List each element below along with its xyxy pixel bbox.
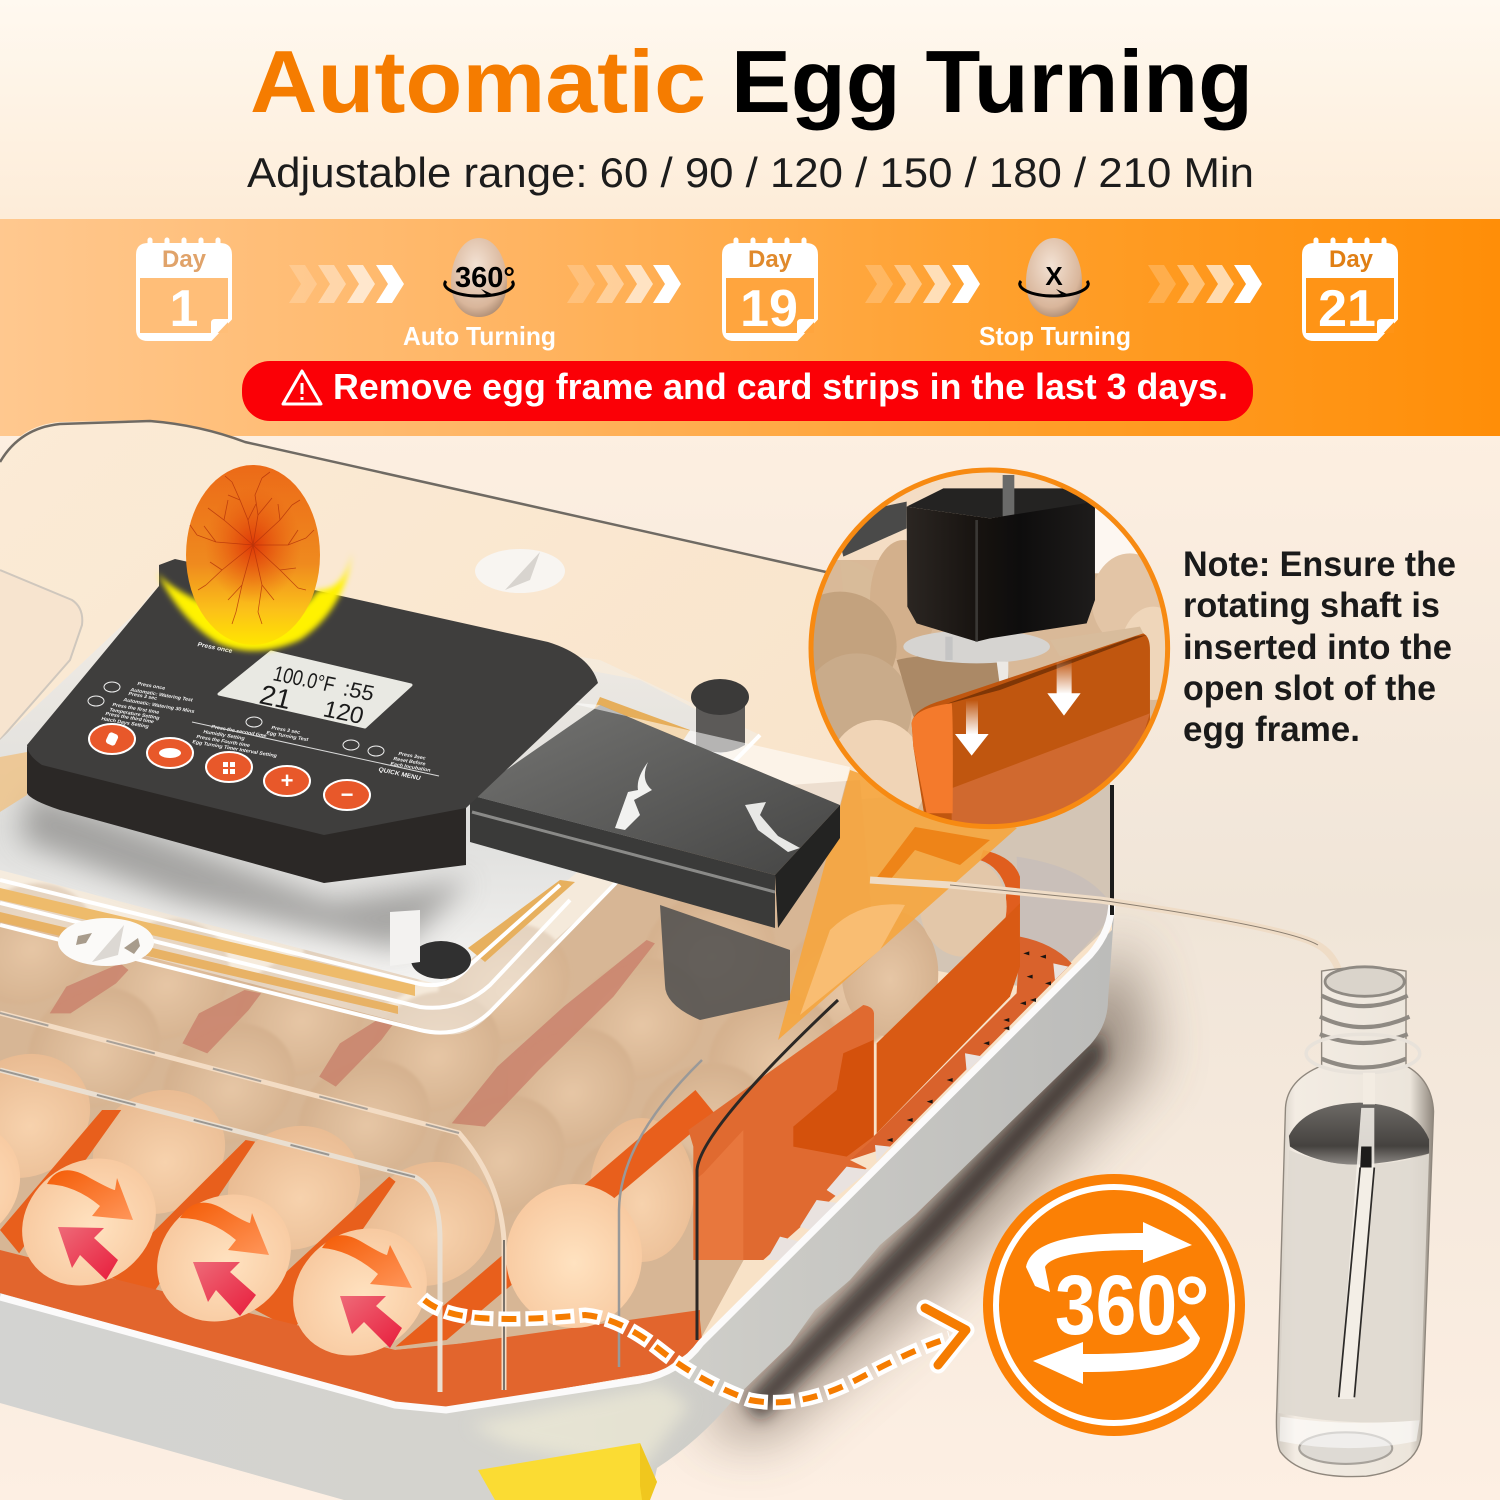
panel side: [27, 747, 466, 883]
icon: red arrow 1: [58, 1227, 118, 1280]
calendar: day 21: Day: [1329, 246, 1374, 273]
callout top background: [838, 472, 1062, 560]
lcd screen: [219, 652, 411, 727]
arrow head: [925, 1308, 966, 1365]
key stem: [996, 662, 1008, 682]
icon: curved orange arrow 2: [180, 1203, 269, 1255]
lid right wall edge: [1110, 785, 1114, 915]
cork strip front: [0, 888, 415, 996]
panel instruction text: Hatch Days Setting: [100, 716, 150, 730]
box end: [775, 805, 840, 928]
water body: [1279, 1150, 1429, 1422]
panel top face: [27, 559, 598, 835]
frame bright edge: [912, 703, 953, 813]
title: Automatic: [250, 32, 706, 131]
calendar: day 19: [723, 240, 817, 340]
panel instruction text: Press 3 sec: [127, 691, 158, 702]
egg red core: [205, 487, 301, 603]
icon: curved orange arrow 3: [322, 1235, 412, 1288]
lid hole disc: [475, 549, 565, 593]
shadow below control panel: [20, 790, 470, 950]
egg seen through orange sheet: [800, 904, 905, 1015]
knob shaft back: [696, 700, 745, 752]
knob front: [411, 941, 471, 979]
cork strip left: [0, 752, 27, 812]
neck threads: [1320, 996, 1409, 1068]
dashed arrow path from egg to 360 badge: [422, 1298, 966, 1402]
eggs: front row with turning arrows: [0, 1098, 642, 1381]
panel instruction text: Reset Before: [392, 756, 426, 767]
white steps: [767, 963, 1068, 1260]
motor disc: [903, 630, 1050, 663]
eggs: back rows: [0, 860, 934, 1276]
water tube: [870, 880, 1345, 1010]
egg behind frame: [842, 910, 938, 1037]
panel instruction text: Press the first time: [111, 702, 160, 716]
lcd readouts: 120: [320, 696, 367, 730]
bottom glass: [1299, 1432, 1392, 1464]
clear sheet over box: [565, 702, 850, 805]
panel instruction text: Egg Turning Timer Interval Setting: [191, 739, 278, 759]
icon: red arrow 2: [193, 1262, 256, 1316]
icon: egg stop turning: X: [1045, 261, 1063, 291]
icon: egg 360 auto turning: [445, 238, 515, 317]
warning pill: Remove egg frame and card strips in the last 3 days.: [333, 366, 1228, 407]
cork strip front 2: [0, 912, 398, 1014]
lid side tray: [0, 570, 82, 740]
panel buttons: [89, 724, 370, 810]
icon: red arrow 3: [340, 1296, 402, 1348]
subtitle: adjustable range: Adjustable range: 60 / 90 / 120 / 150 / 180 / 210 Min: [247, 149, 1254, 196]
plate white edges: [0, 735, 760, 1033]
box bevel: [472, 812, 775, 892]
water bottle: [1276, 967, 1434, 1477]
control panel: [27, 559, 598, 883]
white post: [390, 910, 420, 966]
360 degree badge: [983, 1174, 1245, 1436]
panel instruction text: Automatic: Watering Test: [129, 687, 194, 703]
panel instruction text: Each Incubation: [389, 761, 431, 774]
tube entry: [1363, 1073, 1375, 1104]
calendar: day 1: Day: [162, 246, 207, 273]
white rim: [0, 900, 1112, 1410]
perforated strip: [850, 937, 1072, 1160]
panel instruction text: Press the third time: [104, 711, 155, 725]
straw upper: [1360, 1146, 1372, 1167]
bottom highlight: [1280, 1417, 1420, 1448]
lcd readouts: 100.0°F: [271, 661, 338, 697]
eggs area tint: [0, 780, 880, 1390]
shadow under incubator: [700, 940, 1150, 1440]
motor shaft: [1003, 475, 1014, 518]
panel instruction text: [100, 641, 431, 782]
contact shadow under incubator: [745, 1030, 1105, 1420]
panel instruction text: Egg Turning Test: [265, 730, 309, 743]
air gap: [1289, 1103, 1429, 1165]
callout ring: [811, 470, 1168, 827]
title: Egg Turning: [731, 32, 1253, 131]
top arrow: [1026, 1222, 1192, 1292]
360 numerals: 360: [1055, 1258, 1177, 1352]
calendar: day 21: [1303, 240, 1397, 340]
metal pin: [945, 637, 953, 660]
degree sign: °: [1174, 1258, 1210, 1360]
note text: [1183, 545, 1456, 749]
panel instruction text: Press 3sec: [397, 751, 427, 761]
calendar: day 19: Day: [748, 246, 793, 273]
collar ring: [1306, 1034, 1420, 1073]
bottle body: [1276, 968, 1434, 1477]
header background: [0, 0, 1500, 220]
panel icons small: [88, 682, 384, 756]
dark bar left: [842, 502, 907, 557]
chevron arrows 2: [567, 265, 681, 303]
orange tray lip: [0, 1250, 700, 1408]
lcd readouts: 21: [256, 679, 295, 715]
frame lower lighter: [952, 713, 1150, 830]
right orange egg frames: [688, 850, 1108, 1260]
back orange frame panel: [877, 903, 1020, 1133]
lid top edge line: [0, 421, 835, 574]
frame slot: [943, 635, 1147, 705]
orange translucent lid corner: [778, 770, 1017, 1040]
orange loop: [980, 850, 1020, 923]
panel divider line: [192, 722, 439, 776]
note text: rotating shaft is: [1183, 586, 1440, 625]
bottle opening: [1325, 967, 1404, 996]
panel instruction text: Press once: [196, 641, 234, 655]
label: auto turning: Auto Turning: [403, 321, 556, 351]
title: [250, 32, 1253, 131]
inner back wall: [850, 780, 1110, 990]
knob back: [691, 679, 749, 715]
button glyphs: [105, 731, 353, 807]
panel instruction text: Press once: [136, 681, 166, 692]
incubator lid body: [0, 420, 1112, 1390]
eggs in callout: [814, 540, 1166, 809]
lcd readouts: :55: [341, 676, 377, 706]
panel instruction text: Press the Fourth time: [195, 734, 251, 749]
cork strip back: [570, 697, 690, 790]
box front face: [470, 795, 775, 928]
label: stop turning: Stop Turning: [979, 321, 1131, 351]
chevron arrows 4: [1148, 265, 1262, 303]
calendar: day 19: 19: [740, 280, 798, 338]
note text: open slot of the: [1183, 669, 1436, 708]
bright corner: [1095, 508, 1138, 574]
candling egg with yellow glow: [157, 465, 352, 651]
orange egg frame: [912, 633, 1150, 830]
calendar: day 1: 1: [170, 280, 198, 338]
shaft housing under box: [660, 905, 790, 1020]
note text: egg frame.: [1183, 710, 1360, 749]
motor box: [470, 702, 850, 928]
egg veins: [190, 472, 314, 624]
orange tray floor and front: [0, 1255, 702, 1408]
icon: egg stop turning: [1020, 238, 1088, 317]
egg behind frame 2: [920, 857, 1007, 957]
incubator base: [0, 915, 1114, 1500]
box top face: [470, 705, 840, 875]
lid front disc: [58, 918, 154, 966]
note text: inserted into the: [1183, 628, 1452, 667]
white reflection 1: [615, 762, 652, 830]
clear lid reflection lines: [0, 1000, 838, 1392]
chevron arrows 3: [865, 265, 980, 303]
panel instruction text: Press 3 sec: [270, 725, 301, 736]
chevron arrows 1: [289, 265, 404, 303]
perforation dots: [887, 951, 1051, 1142]
straw: [1339, 1108, 1374, 1399]
white reflection 2: [745, 802, 800, 852]
callout circle: rotating shaft detail: [808, 468, 1170, 830]
icon: egg 360 auto turning: 360°: [455, 262, 515, 294]
panel instruction text: Temperature Setting: [108, 707, 160, 721]
cork strip right: [468, 880, 575, 962]
panel instruction text: Press the second time: [210, 724, 268, 739]
orange frame seen through sheet: [875, 827, 990, 880]
down arrow right: [1047, 660, 1081, 716]
panel instruction text: QUICK MENU: [377, 766, 422, 782]
egg dividers: back: [50, 940, 655, 1127]
note text: Note: Ensure the: [1183, 545, 1456, 584]
motor body: [907, 502, 1095, 642]
egg dividers: front: [0, 1090, 715, 1347]
acrylic plate under control panel: [0, 590, 760, 1035]
pale orange egg reflection: [695, 1130, 743, 1260]
lcd readouts: [256, 661, 377, 730]
button glyphs: +: [281, 768, 293, 793]
down arrow left: [955, 700, 989, 756]
calendar: day 21: 21: [1318, 280, 1376, 338]
icon: curved orange arrow 1: [47, 1170, 133, 1220]
warning pill: [242, 361, 1253, 421]
panel instruction text: Automatic: Watering 30 Mins: [122, 697, 195, 715]
timeline band: [0, 219, 1500, 436]
eggs: middle row: [0, 1030, 694, 1310]
bottom arrow: [1033, 1315, 1200, 1384]
motor edge: [975, 520, 978, 642]
base shading highlight: [470, 1385, 690, 1470]
motor top: [907, 488, 1095, 518]
lower background: [0, 430, 1500, 1500]
yellow water tab: [478, 1443, 657, 1500]
front orange frame panel: [688, 1005, 874, 1260]
calendar: day 1: [137, 240, 231, 340]
panel instruction text: Humidity Setting: [202, 729, 246, 742]
darker frame patch: [793, 1040, 873, 1157]
inner grey wall: [1017, 857, 1108, 963]
straw dark edge: [1339, 1167, 1374, 1397]
button glyphs: −: [341, 782, 353, 807]
